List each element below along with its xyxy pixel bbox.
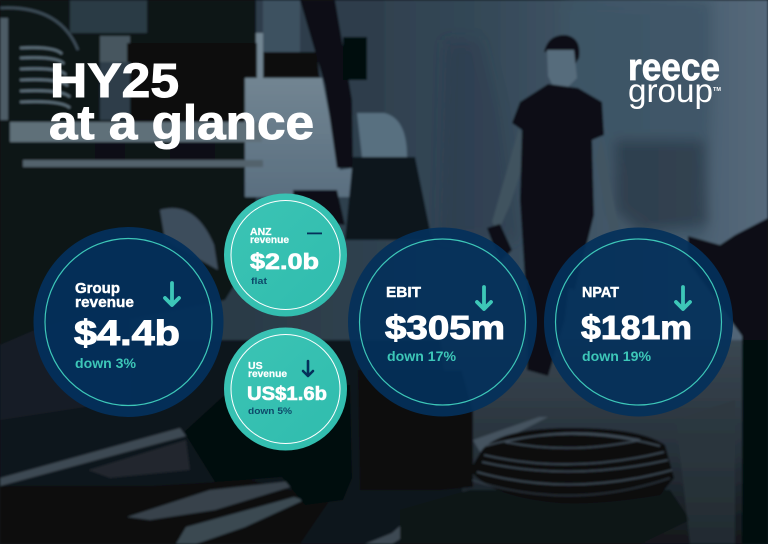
background: cable coil <box>470 428 674 503</box>
label: US revenue: revenue <box>248 368 287 380</box>
value: $4.4b: $4.4b <box>74 314 180 353</box>
change: flat: flat <box>251 276 268 287</box>
title <box>49 55 314 150</box>
background: crate <box>358 370 473 490</box>
panel: NPAT <box>544 228 733 416</box>
label: group revenue <box>75 281 134 311</box>
background: worker <box>487 35 619 376</box>
change: down 17%: down 17% <box>387 349 456 364</box>
logo: reece group: group <box>628 72 713 109</box>
change: down 19%: down 19% <box>582 349 651 364</box>
value: $181m: $181m <box>581 309 692 346</box>
title: HY25 <box>50 55 179 108</box>
label: US revenue <box>248 360 287 380</box>
label: group revenue: Group <box>75 281 120 297</box>
title: at a glance <box>49 97 314 150</box>
panel: EBIT <box>348 228 537 416</box>
label: US revenue: US <box>248 360 263 372</box>
background: truck <box>0 0 432 420</box>
icon: down arrow <box>477 287 491 309</box>
panel: group revenue <box>34 227 224 417</box>
background: crouching figure <box>184 385 352 505</box>
panel: ANZ revenue <box>224 194 347 316</box>
label: NPAT: NPAT <box>582 285 619 301</box>
background: right edge machinery <box>688 218 768 340</box>
label: ANZ revenue: revenue <box>250 234 289 246</box>
label: ANZ revenue: ANZ <box>250 226 272 238</box>
icon: down arrow <box>303 361 313 376</box>
value: $305m: $305m <box>385 309 505 346</box>
icon: down arrow <box>676 287 690 309</box>
label: group revenue: revenue <box>75 295 134 311</box>
label: ANZ revenue <box>250 226 289 246</box>
logo: reece group: reece <box>628 47 720 89</box>
icon: down arrow <box>165 283 179 305</box>
logo: reece group <box>628 47 721 109</box>
panel: US revenue <box>224 328 347 450</box>
background: excavator in fog <box>440 0 712 240</box>
icon: flat dash <box>307 232 322 234</box>
logo: reece group: TM <box>713 87 721 93</box>
change: down 5%: down 5% <box>248 406 293 417</box>
change: down 3%: down 3% <box>75 356 136 371</box>
value: $2.0b: $2.0b <box>250 249 319 274</box>
value: US$1.6b: US$1.6b <box>247 384 327 405</box>
background: floor <box>300 340 768 544</box>
background: floor light streaks and shadows <box>0 320 768 544</box>
label: EBIT: EBIT <box>386 285 421 301</box>
